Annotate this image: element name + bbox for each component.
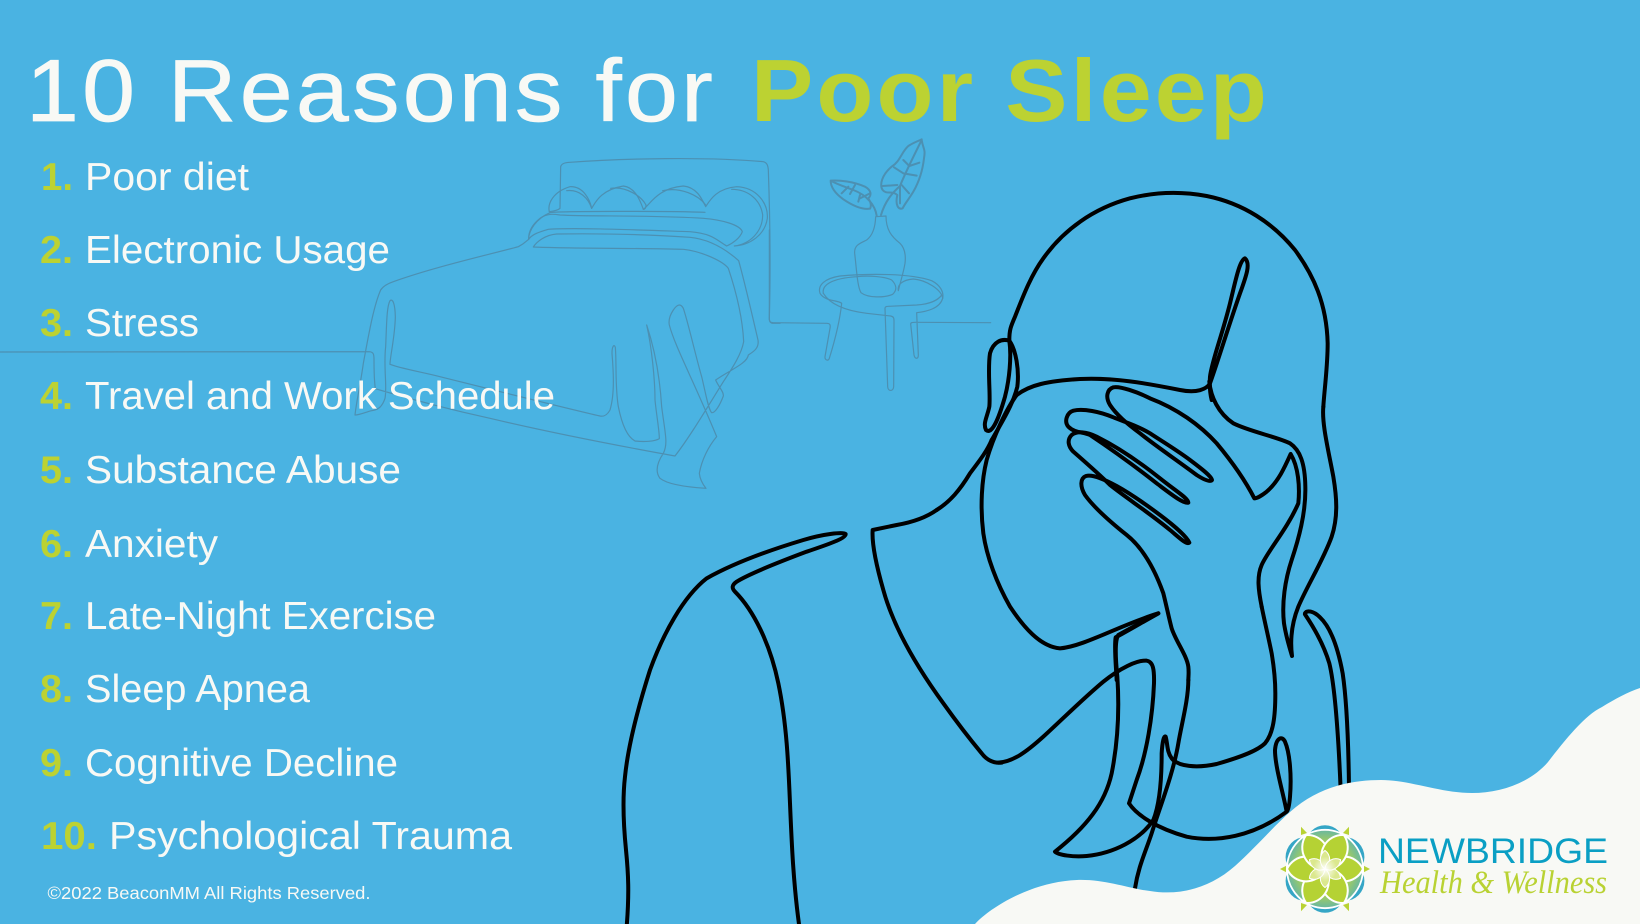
figure: hand, hair and neck	[937, 382, 1349, 790]
item 1: 1.	[41, 156, 73, 199]
item 3: 3.	[40, 302, 73, 345]
illustration: faded side table with plant vase	[769, 139, 991, 390]
item 6: Anxiety	[85, 523, 219, 566]
figure: head, part line and ear	[985, 193, 1328, 440]
item 3	[40, 302, 199, 345]
title	[26, 41, 1270, 140]
item 2: Electronic Usage	[85, 229, 390, 272]
item 8: 8.	[40, 668, 73, 711]
cream wave corner	[975, 688, 1640, 924]
item 9: Cognitive Decline	[85, 742, 398, 785]
copyright line: ©2022 BeaconMM All Rights Reserved.	[48, 883, 370, 903]
item 2: 2.	[40, 229, 73, 272]
list of ten reasons	[40, 156, 555, 858]
illustration: black single-line figure with hand on face	[624, 193, 1349, 924]
logo tagline: Health & Wellness	[1379, 865, 1607, 901]
item 6: 6.	[40, 523, 73, 566]
logo wordmark: NEWBRIDGE	[1378, 832, 1608, 871]
item 5: 5.	[40, 449, 73, 492]
item 7: Late-Night Exercise	[85, 595, 436, 638]
title: 10 Reasons for	[26, 41, 716, 140]
illustration: faded bed line art	[0, 159, 780, 488]
icon: flower mandala	[1280, 825, 1370, 913]
item 1: Poor diet	[85, 156, 249, 199]
item 7: 7.	[40, 595, 73, 638]
item 4: Travel and Work Schedule	[85, 375, 555, 418]
figure: shoulder and neckline	[624, 510, 1002, 924]
item 5: Substance Abuse	[85, 449, 401, 492]
item 10: Psychological Trauma	[109, 815, 513, 858]
item 10: 10.	[41, 815, 97, 858]
item 8: Sleep Apnea	[85, 668, 311, 711]
figure: collar and supporting arm	[998, 607, 1291, 888]
item 3: Stress	[85, 302, 199, 345]
title: Poor Sleep	[751, 41, 1270, 140]
item 9: 9.	[40, 742, 73, 785]
logo: Newbridge Health & Wellness	[1280, 825, 1608, 913]
item 4: 4.	[40, 375, 73, 418]
